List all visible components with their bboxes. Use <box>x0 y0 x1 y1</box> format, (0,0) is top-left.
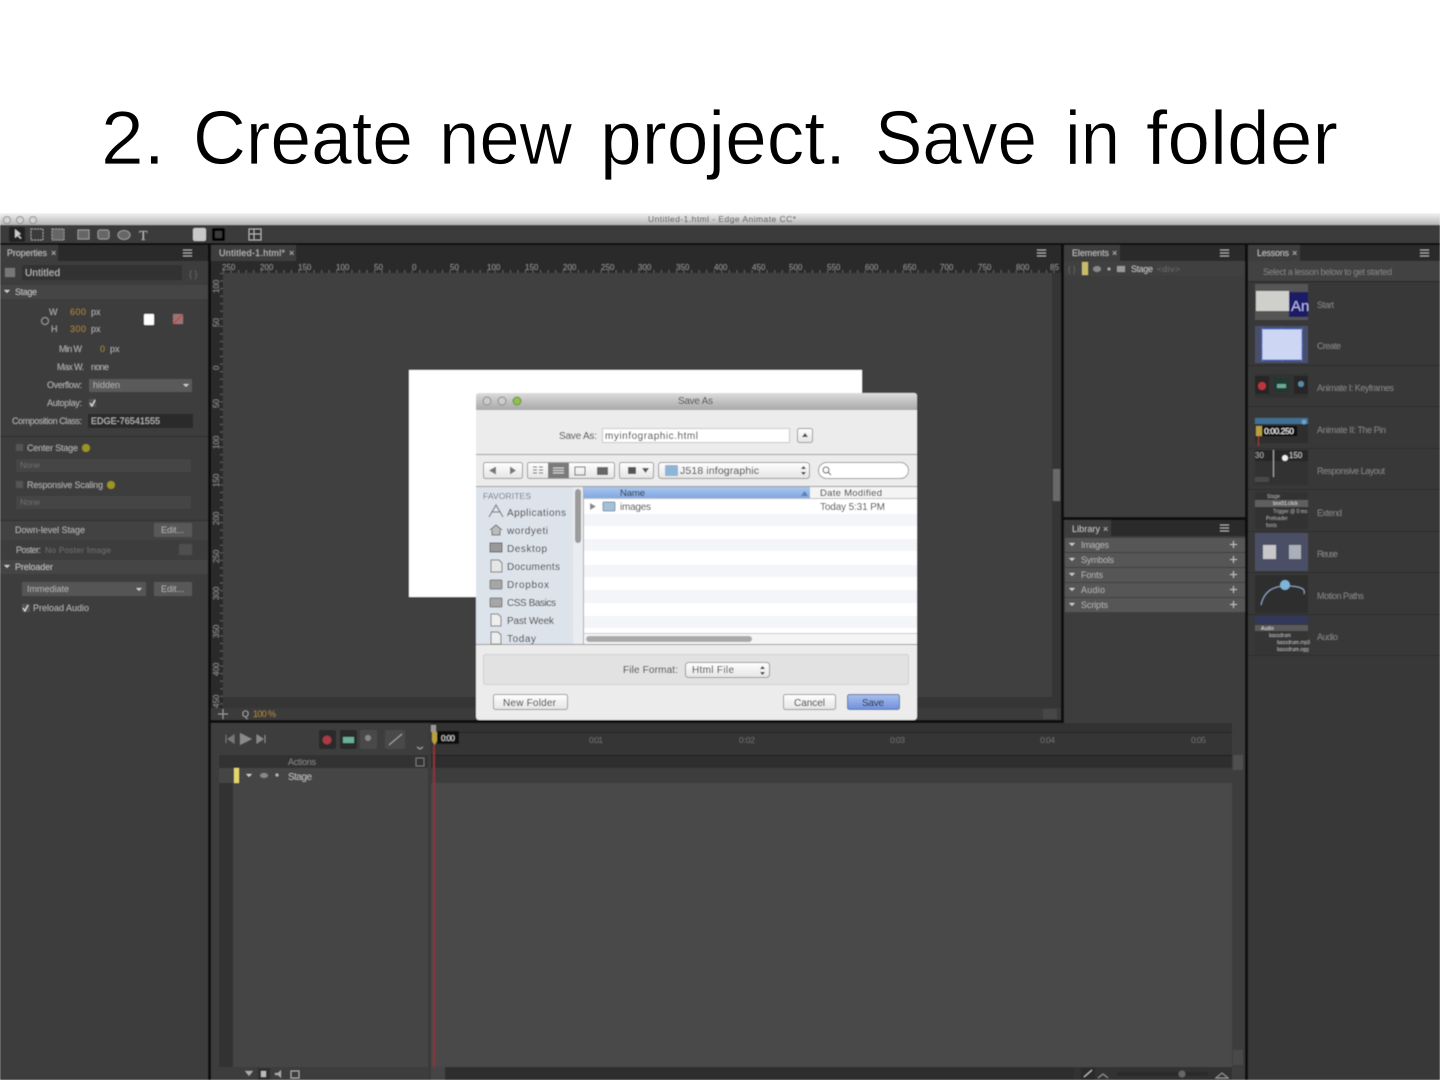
lesson: reuse: Reuse <box>1317 549 1338 559</box>
stage section: 0 <box>100 344 105 354</box>
horizontal ruler: 50 <box>450 263 459 272</box>
favorites sidebar: wordyeti <box>506 526 548 537</box>
file format box: Html File <box>692 665 734 676</box>
vertical ruler: 100 <box>212 435 221 449</box>
stage layer row: Stage <box>288 772 312 783</box>
down-level stage and poster: Down-level Stage <box>15 525 85 535</box>
panel: elements: × <box>1112 248 1117 258</box>
horizontal ruler: 650 <box>903 263 917 272</box>
lesson: audio: bassdrum.mp3 <box>1277 640 1310 646</box>
lesson: audio: bassdrum.ogg <box>1277 647 1309 653</box>
horizontal ruler: 600 <box>865 263 879 272</box>
lesson: extend: fonts <box>1266 523 1277 529</box>
stage section: Max W. <box>57 362 84 372</box>
title: new <box>439 96 573 181</box>
properties tab <box>0 245 192 261</box>
library rows: Images <box>1081 540 1110 550</box>
vertical ruler: 150 <box>212 473 221 487</box>
zoom status bar: Q <box>242 709 249 719</box>
lesson: animate II the pin: 0:00.250 <box>1264 426 1294 436</box>
vertical ruler: 100 <box>212 279 221 293</box>
stage section: 300 <box>70 324 86 334</box>
library rows: Symbols <box>1081 555 1114 565</box>
title: Save <box>875 96 1037 181</box>
favorites sidebar: Desktop <box>507 544 547 555</box>
zoom status bar <box>211 708 1061 720</box>
library rows: Fonts <box>1081 570 1104 580</box>
library rows <box>1065 538 1245 612</box>
timeline ruler: 0:02 <box>739 735 755 745</box>
horizontal ruler: 50 <box>374 263 383 272</box>
timeline ruler <box>431 723 1232 755</box>
panel: library <box>1064 520 1245 1080</box>
vertical ruler: 50 <box>212 318 221 327</box>
favorites sidebar: Documents <box>507 562 560 573</box>
file list <box>476 487 917 645</box>
vertical ruler: 50 <box>212 399 221 408</box>
zoom status bar: 100 % <box>253 709 276 719</box>
dialog: save as <box>476 393 917 720</box>
favorites sidebar <box>476 487 583 645</box>
dialog title bar: Save As <box>678 396 713 407</box>
timeline ruler: 0:03 <box>890 735 905 745</box>
lesson: audio: bassdrum <box>1269 633 1291 639</box>
properties tab: × <box>51 248 56 258</box>
horizontal ruler: 0 <box>412 263 417 272</box>
lesson separators <box>1248 366 1440 656</box>
title: in <box>1065 96 1120 181</box>
horizontal ruler: 250 <box>222 263 236 272</box>
timeline ruler: 0:05 <box>1191 735 1206 745</box>
panel: library: Library <box>1072 524 1100 534</box>
actions row: Actions <box>288 757 316 767</box>
down-level stage and poster: No Poster Image <box>45 545 111 555</box>
title: project. <box>600 96 846 181</box>
lesson: audio: Audio <box>1261 626 1274 632</box>
lesson: create: Create <box>1317 341 1341 351</box>
horizontal ruler: 150 <box>298 263 312 272</box>
lesson: reuse <box>1255 533 1338 571</box>
stage section: Min W <box>59 344 82 354</box>
preloader section: Immediate <box>27 584 69 594</box>
favorites sidebar: Today <box>507 634 536 645</box>
lesson: audio: Audio <box>1317 632 1338 642</box>
vertical ruler <box>211 273 223 708</box>
document tab: × <box>289 248 294 258</box>
vertical ruler: 250 <box>212 549 221 563</box>
favorites sidebar: FAVORITES <box>483 491 531 501</box>
file list: Date Modified <box>820 488 882 499</box>
dialog title bar <box>476 393 917 410</box>
lesson: start: Start <box>1317 300 1334 310</box>
title: 2. <box>101 96 165 181</box>
horizontal ruler: 550 <box>827 263 841 272</box>
file format box: File Format: <box>623 665 678 676</box>
stage section: px <box>110 344 120 354</box>
favorites sidebar: Past Week <box>507 616 555 627</box>
stage section: Composition Class: <box>12 416 82 426</box>
horizontal scrollbar <box>223 697 1061 708</box>
horizontal ruler: 250 <box>601 263 615 272</box>
panel: elements: { } <box>1068 265 1076 274</box>
lesson: animate II the pin: Animate II: The Pin <box>1317 425 1386 435</box>
horizontal ruler: 200 <box>563 263 577 272</box>
horizontal ruler: 350 <box>676 263 690 272</box>
panel: library: × <box>1103 524 1108 534</box>
vertical ruler: 450 <box>212 694 221 708</box>
panel: elements: Elements <box>1072 248 1110 258</box>
vertical ruler: 350 <box>212 624 221 638</box>
composition name field: { } <box>189 269 198 279</box>
timeline layer body <box>233 783 428 1067</box>
timeline footer <box>219 1067 428 1080</box>
composition name field <box>5 265 198 280</box>
stage section: px <box>91 307 101 317</box>
lesson: responsive layout <box>1255 450 1385 485</box>
lesson: create <box>1255 326 1341 363</box>
properties tab: Properties <box>7 248 48 258</box>
center stage and responsive scaling options <box>0 443 208 521</box>
panel: timeline <box>211 723 1245 1080</box>
new folder button: New Folder <box>503 698 557 709</box>
stage section: Autoplay: <box>47 398 82 408</box>
lesson: extend: box01.click <box>1273 501 1298 507</box>
lesson: motion paths: Motion Paths <box>1317 591 1364 601</box>
panel: lessons: × <box>1292 248 1297 258</box>
title: folder <box>1146 96 1338 181</box>
stage section: EDGE-76541555 <box>91 416 160 426</box>
lesson: motion paths <box>1255 575 1364 613</box>
horizontal ruler: 100 <box>487 263 501 272</box>
stage section: hidden <box>93 380 120 390</box>
library rows: Audio <box>1081 585 1105 595</box>
cancel button <box>784 694 836 710</box>
panel: elements <box>1064 245 1245 517</box>
center stage and responsive scaling options: None <box>20 497 40 507</box>
down-level stage and poster: Edit... <box>161 525 184 535</box>
preloader section: Preload Audio <box>33 603 89 613</box>
horizontal ruler: 150 <box>525 263 539 272</box>
file format box <box>484 654 908 684</box>
horizontal ruler: 400 <box>714 263 728 272</box>
stage section: W <box>49 307 58 317</box>
stage section: H <box>51 324 58 334</box>
timeline controls <box>219 723 428 755</box>
lesson: start: An <box>1291 298 1309 315</box>
horizontal ruler: 100 <box>336 263 350 272</box>
vertical scrollbar <box>1052 273 1061 697</box>
panel: lessons: Select a lesson below to get started <box>1263 267 1392 277</box>
composition name field: Untitled <box>25 268 60 279</box>
preloader section: Preloader <box>15 562 53 572</box>
actions row <box>219 755 428 768</box>
save as filename row: myinfographic.html <box>605 431 698 442</box>
horizontal ruler <box>211 261 1061 273</box>
stage section: 600 <box>70 307 86 317</box>
center stage and responsive scaling options: None <box>20 460 40 470</box>
horizontal ruler: 200 <box>260 263 274 272</box>
toolbar: T <box>139 229 148 244</box>
timeline footer right <box>431 1067 1232 1080</box>
lesson: extend <box>1255 492 1342 529</box>
playhead: 0:00 <box>441 734 456 743</box>
center stage and responsive scaling options: Responsive Scaling <box>27 480 103 490</box>
stage section: none <box>91 362 109 372</box>
new folder button <box>494 694 568 710</box>
horizontal ruler: 800 <box>1016 263 1030 272</box>
timeline ruler: 0:01 <box>589 735 603 745</box>
file list: Today 5:31 PM <box>820 502 885 513</box>
horizontal ruler: 500 <box>789 263 803 272</box>
cancel button: Cancel <box>794 698 825 709</box>
stage section: Overflow: <box>47 380 82 390</box>
title <box>101 96 1338 181</box>
favorites sidebar: CSS Basics <box>507 598 556 609</box>
stage section <box>0 285 208 437</box>
lesson: animate I keyframes <box>1255 374 1394 398</box>
preloader section: Edit... <box>161 584 184 594</box>
horizontal ruler: 85 <box>1050 263 1059 272</box>
lesson: extend: Extend <box>1317 508 1342 518</box>
lesson: audio <box>1255 616 1338 654</box>
panel: lessons: Lessons <box>1257 248 1290 258</box>
preloader section <box>0 560 208 613</box>
horizontal ruler: 300 <box>638 263 652 272</box>
lesson: start <box>1255 284 1334 320</box>
timeline scrollbar <box>1232 723 1245 1080</box>
stage section: px <box>91 324 101 334</box>
panel: elements: <div> <box>1157 264 1180 274</box>
white stage <box>409 370 862 597</box>
lesson: extend: Trigger @ 0 ms <box>1273 509 1308 515</box>
stage section: Stage <box>15 287 37 297</box>
down-level stage and poster: Poster: <box>16 545 41 555</box>
save button <box>848 694 900 710</box>
save button: Save <box>862 698 884 709</box>
title bar: Untitled-1.html - Edge Animate CC* <box>648 214 797 224</box>
document tab: Untitled-1.html* <box>219 248 285 258</box>
panel: elements: Stage <box>1131 264 1153 274</box>
file list: Name <box>620 488 645 499</box>
lesson: animate I keyframes: Animate I: Keyframes <box>1317 383 1394 393</box>
document tab <box>211 245 1046 261</box>
favorites sidebar: Dropbox <box>507 580 549 591</box>
lesson: responsive layout: Responsive Layout <box>1317 466 1385 476</box>
library rows: Scripts <box>1081 600 1108 610</box>
finder toolbar <box>476 462 917 487</box>
finder toolbar: J518 infographic <box>680 465 759 477</box>
timeline track rows <box>431 755 1232 1067</box>
horizontal ruler: 450 <box>752 263 766 272</box>
timeline ruler: 0:04 <box>1040 735 1055 745</box>
vertical ruler: 0 <box>212 365 221 370</box>
lesson: extend: Preloader <box>1266 516 1288 522</box>
lesson: animate II the pin <box>1255 418 1386 446</box>
save as filename row: Save As: <box>559 431 597 442</box>
horizontal ruler: 700 <box>940 263 954 272</box>
vertical ruler: 400 <box>212 662 221 676</box>
center stage and responsive scaling options: Center Stage <box>27 443 78 453</box>
title bar <box>0 213 1440 225</box>
lesson: responsive layout: 150 <box>1289 451 1303 460</box>
lesson: extend: Stage <box>1267 494 1280 500</box>
horizontal ruler: 750 <box>978 263 992 272</box>
panel: lessons <box>1248 245 1440 1080</box>
favorites sidebar: Applications <box>507 508 566 519</box>
file list: images <box>620 502 651 513</box>
lesson: responsive layout: 30 <box>1255 451 1264 460</box>
down-level stage and poster <box>0 521 208 555</box>
toolbar <box>0 225 1440 244</box>
vertical ruler: 200 <box>212 511 221 525</box>
panel: stage canvas <box>211 245 1061 720</box>
panel: properties <box>0 245 208 1080</box>
save as filename row <box>476 428 917 455</box>
stage layer row <box>219 768 428 783</box>
title: Create <box>193 96 413 181</box>
playhead <box>432 731 459 1067</box>
vertical ruler: 300 <box>212 586 221 600</box>
